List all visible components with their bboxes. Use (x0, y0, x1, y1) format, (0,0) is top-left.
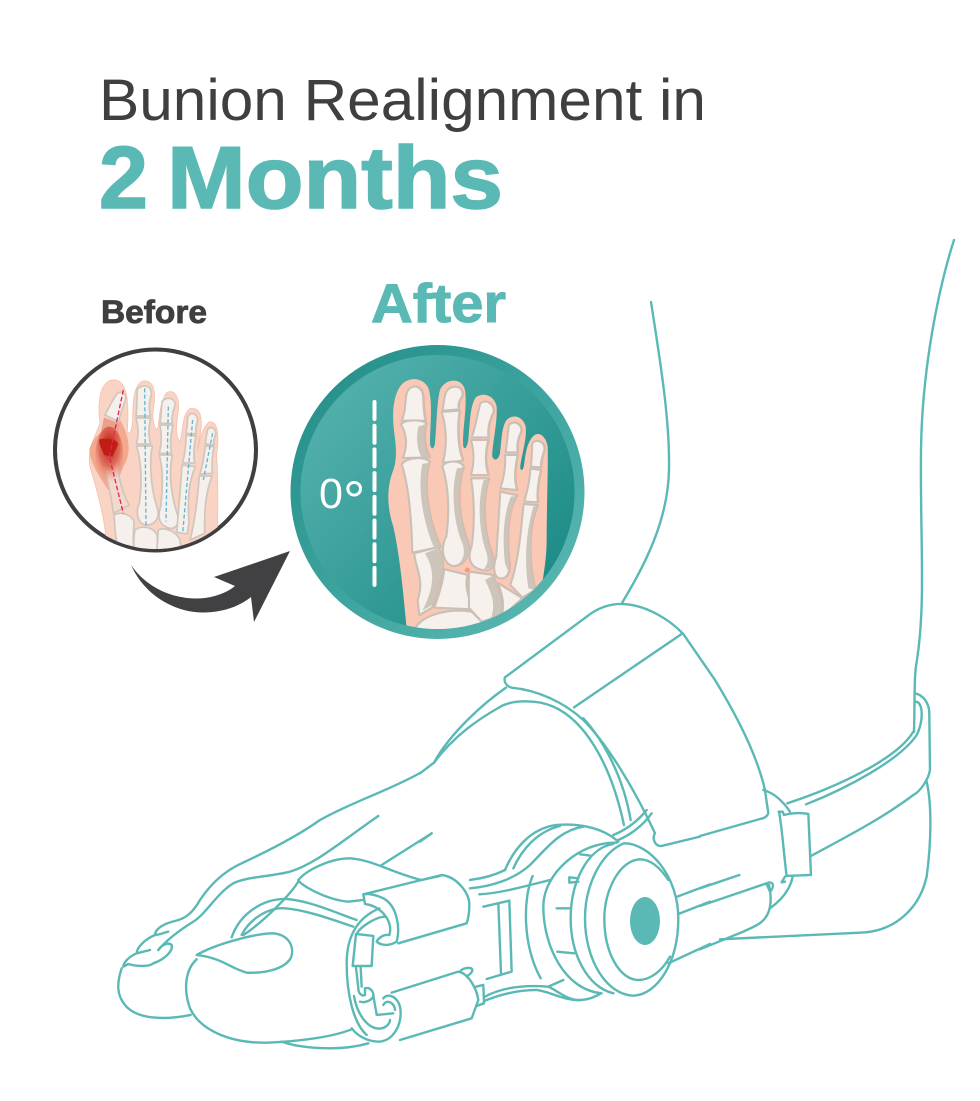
after circle: aligned foot (290, 345, 584, 639)
red alignment line (109, 390, 123, 513)
pad over foot (420, 604, 715, 846)
bones (401, 386, 544, 635)
zero degree label: 0 (319, 470, 343, 518)
inflamed bunion (89, 420, 129, 490)
lower roller (392, 972, 478, 1040)
bone shading (417, 424, 537, 618)
foot with brace line drawing (118, 240, 954, 1048)
title: Bunion Realignment in (99, 68, 706, 133)
toes, toe plate and arch (118, 816, 440, 1048)
curved arrow (131, 551, 290, 622)
buckle (779, 812, 811, 876)
title: Months (167, 128, 503, 227)
leg outline (622, 240, 954, 732)
before label: Before (101, 294, 207, 330)
red joint (95, 427, 123, 483)
skin (89, 380, 218, 557)
dial and centre plate (470, 810, 710, 1006)
blue alignment lines (145, 388, 213, 533)
hub dot (630, 897, 660, 945)
vertical dashed reference line (372, 402, 376, 585)
before circle: foot with bunion (55, 350, 256, 557)
ring, hook and rollers (347, 875, 478, 1042)
upper roller (363, 875, 469, 943)
bones (99, 386, 216, 553)
skin (388, 379, 548, 637)
zero degree label: ° (343, 469, 365, 532)
hook cylinder (353, 934, 373, 966)
big toe nail (197, 933, 292, 973)
after label: After (371, 272, 506, 334)
title: 2 (99, 128, 148, 227)
foot top connector (320, 773, 420, 820)
big toe (186, 959, 352, 1043)
rear bar and slider (700, 875, 739, 888)
arch band under pad (420, 688, 506, 773)
title (99, 68, 706, 227)
small orange joint accent (464, 567, 470, 573)
heel strap and heel (700, 680, 930, 949)
